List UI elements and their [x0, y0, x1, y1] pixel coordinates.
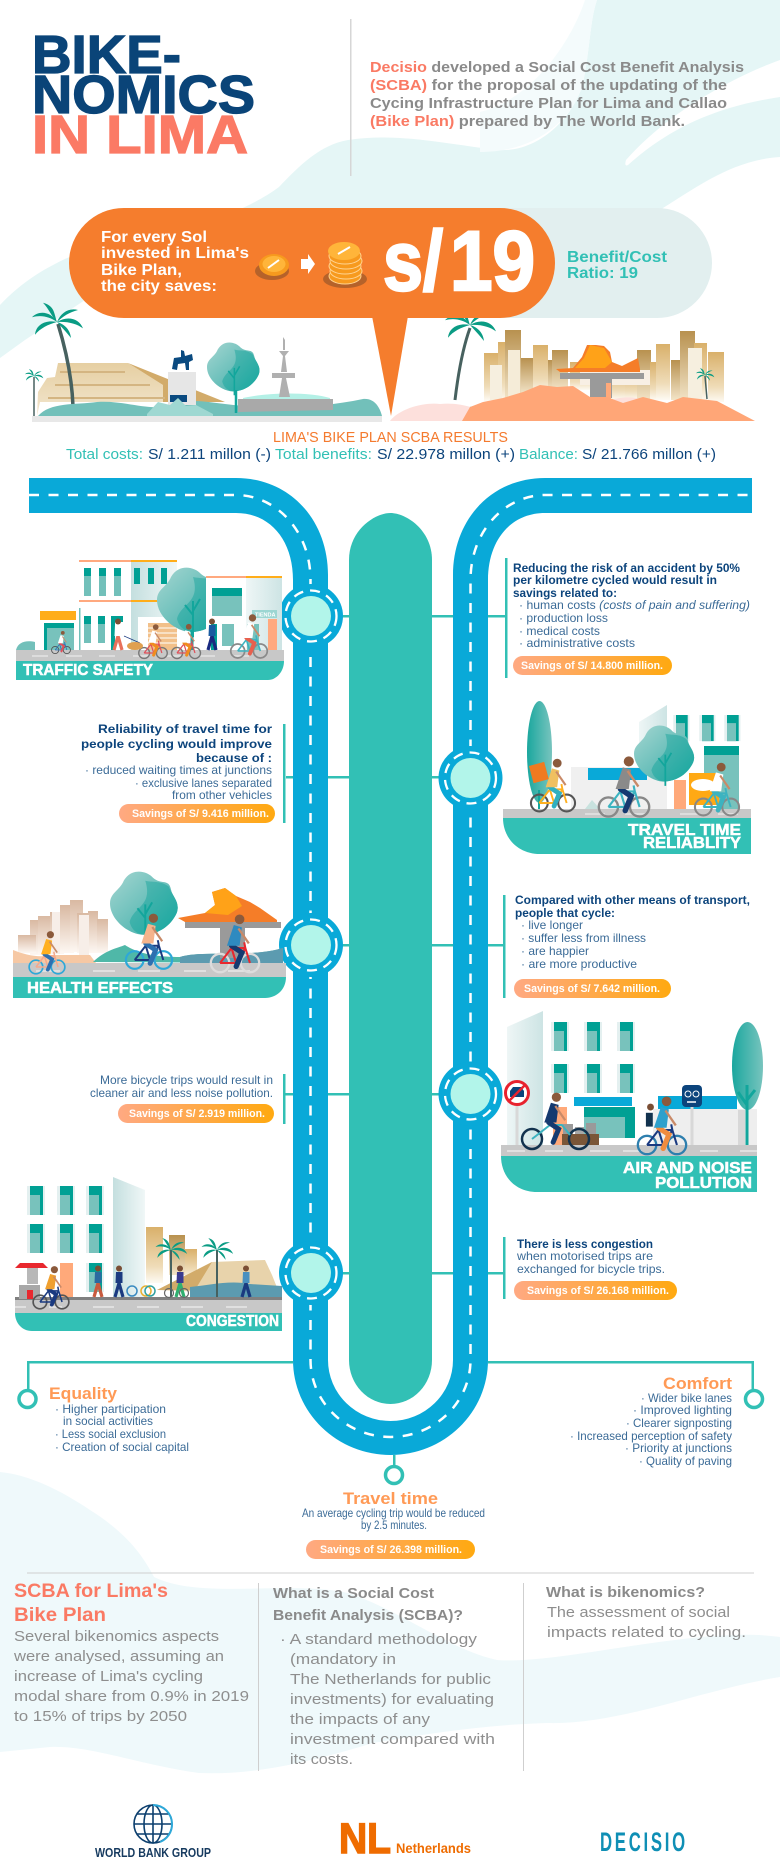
text: travel time reliability: · reduced waiting times at junctions: [85, 764, 272, 777]
text: comfort: Comfort: [663, 1374, 732, 1393]
intro paragraph: (Bike Plan) prepared by The World Bank.: [370, 114, 685, 130]
text: travel time reliability: because of :: [196, 752, 272, 765]
column: what is bikenomics: [546, 1584, 746, 1641]
background wave: bottom: [0, 1472, 780, 1773]
illustration: left cityscape: [25, 303, 382, 422]
text: health effects: · are happier: [521, 945, 589, 958]
cyclists and pedestrians: [33, 1266, 250, 1309]
label: health effects: HEALTH EFFECTS: [27, 980, 173, 997]
intro paragraph: Decisio developed a Social Cost Benefit Analysis: [370, 60, 744, 76]
savings pill: Savings of S/ 26.398 million.: [320, 1544, 462, 1556]
text: traffic safety: · production loss: [519, 612, 608, 625]
column: SCBA for Lima's Bike Plan: SCBA for Lima's: [14, 1581, 168, 1602]
savings pill: [306, 1540, 475, 1559]
column: SCBA for Lima's Bike Plan: were analysed, assuming an: [13, 1648, 224, 1665]
benefit/cost label: Benefit/Cost: [567, 249, 667, 266]
background wave: top: [0, 0, 780, 358]
label: traffic safety: TRAFFIC SAFETY: [23, 662, 154, 679]
text: congestion: [514, 1238, 677, 1300]
text: equality: Equality: [49, 1384, 118, 1403]
logo: Decisio: DECISIO: [600, 1827, 688, 1857]
savings pill: [513, 656, 672, 675]
cyclists: [522, 1093, 686, 1154]
text: health effects: [514, 894, 750, 998]
text: travel time reliability: · exclusive lanes separated: [135, 777, 272, 790]
label: air and noise pollution: POLLUTION: [655, 1175, 752, 1192]
label: travel time reliability: RELIABLITY: [643, 835, 742, 852]
text: travel time reliability: from other vehicles: [172, 789, 272, 802]
column: what is SCBA: investments) for evaluating: [290, 1691, 494, 1708]
results figures: Total benefits:: [275, 447, 372, 463]
results figures: S/ 1.211 millon (-): [148, 447, 271, 463]
column: SCBA for Lima's Bike Plan: Bike Plan: [14, 1605, 106, 1626]
column: what is SCBA: (mandatory in: [290, 1651, 396, 1668]
text: health effects: people that cycle:: [515, 907, 615, 920]
callout text: [101, 229, 249, 295]
column: SCBA for Lima's Bike Plan: to 15% of trips by 2050: [14, 1708, 187, 1725]
results figures: S/ 21.766 millon (+): [582, 447, 716, 463]
results figures: [66, 447, 716, 463]
savings pill: [514, 979, 671, 998]
illustration: right cityscape: [390, 306, 755, 421]
label: travel time reliability: [628, 822, 742, 852]
icon: bike lane sign: [682, 1085, 702, 1145]
text: equality: in social activities: [63, 1415, 153, 1428]
callout text: Bike Plan,: [101, 262, 182, 279]
column: what is bikenomics: impacts related to cycling.: [547, 1624, 746, 1641]
title: BIKE-: [32, 25, 181, 85]
label: congestion: CONGESTION: [186, 1313, 279, 1330]
text: travel time: An average cycling trip would be reduced: [302, 1507, 485, 1520]
results heading: LIMA'S BIKE PLAN SCBA RESULTS: [273, 430, 508, 446]
column: what is SCBA: the impacts of any: [290, 1711, 431, 1728]
big number: s/: [383, 214, 443, 308]
cyclists and pedestrians: [52, 614, 267, 659]
icon: no cars sign: [506, 1082, 528, 1145]
savings pill: Savings of S/ 14.800 million.: [521, 660, 663, 672]
results figures: S/ 22.978 millon (+): [377, 447, 515, 463]
speech pointer: [372, 316, 408, 416]
panel: travel time reliability illustration: [503, 701, 751, 854]
text: equality: · Creation of social capital: [55, 1441, 189, 1454]
text: health effects: · suffer less from illness: [521, 932, 646, 945]
icon: arrow: [301, 254, 315, 274]
text: congestion: exchanged for bicycle trips.: [517, 1263, 665, 1276]
title: NOMICS: [32, 65, 255, 125]
label: travel time reliability: TRAVEL TIME: [628, 822, 741, 839]
logo: Netherlands: Netherlands: [396, 1840, 471, 1856]
column: what is SCBA: What is a Social Cost: [273, 1585, 434, 1602]
text: air and noise: cleaner air and less noise pollution.: [90, 1087, 273, 1100]
benefit/cost label: [567, 249, 667, 282]
column: SCBA for Lima's Bike Plan: modal share from 0.9% in 2019: [14, 1688, 249, 1705]
savings pill: [514, 1281, 677, 1300]
text: air and noise: More bicycle trips would result in: [100, 1074, 273, 1087]
results figures: Total costs:: [66, 447, 143, 463]
intro paragraph: (SCBA) for the proposal of the updating of the: [370, 78, 727, 94]
text: equality: · Less social exclusion: [55, 1428, 166, 1441]
text: congestion: when motorised trips are: [516, 1250, 653, 1263]
text: travel time: [302, 1489, 485, 1559]
panel: health effects illustration: [13, 872, 286, 998]
logo: World Bank Group: WORLD BANK GROUP: [95, 1846, 211, 1860]
column: SCBA for Lima's Bike Plan: Several bikenomics aspects: [14, 1628, 219, 1645]
cyclists: [529, 756, 739, 817]
logo: Netherlands: [339, 1815, 471, 1863]
cart with pots: [562, 1123, 599, 1145]
intro paragraph: Cycing Infrastructure Plan for Lima and Callao: [370, 96, 727, 112]
callout text: the city saves:: [101, 278, 217, 295]
roundabouts: [279, 584, 502, 1305]
results figures: Balance:: [519, 447, 578, 463]
text: comfort: · Quality of paving: [639, 1455, 732, 1468]
savings pill: Savings of S/ 2.919 million.: [129, 1108, 265, 1120]
text: comfort: · Wider bike lanes: [641, 1392, 732, 1405]
text: traffic safety: savings related to:: [513, 587, 617, 600]
panel: air and noise pollution illustration: [501, 1011, 763, 1192]
column: what is SCBA: · A standard methodology: [280, 1631, 478, 1648]
text: health effects: · are more productive: [521, 958, 637, 971]
column: SCBA for Lima's Bike Plan: increase of Lima's cycling: [14, 1668, 203, 1685]
label: air and noise pollution: [623, 1160, 752, 1192]
callout text: invested in Lima's: [101, 245, 249, 262]
text: traffic safety: [513, 562, 750, 675]
savings pill: [119, 804, 275, 823]
logo: Netherlands: NL: [339, 1815, 391, 1863]
intro paragraph: [370, 60, 744, 130]
column: what is SCBA: investment compared with: [290, 1731, 495, 1748]
benefit/cost label: Ratio: 19: [567, 265, 638, 282]
text: travel time reliability: people cycling would improve: [81, 738, 273, 751]
road: [29, 478, 752, 1455]
callout text: For every Sol: [101, 229, 207, 246]
background wave: top light band: [480, 0, 597, 152]
footer dividers: [27, 1572, 754, 1771]
big number: [383, 214, 535, 308]
savings pill: Savings of S/ 26.168 million.: [527, 1285, 669, 1297]
label: air and noise pollution: AIR AND NOISE: [623, 1160, 752, 1177]
text: travel time: by 2.5 minutes.: [361, 1519, 427, 1532]
column: what is SCBA: [273, 1585, 495, 1768]
text: comfort: · Priority at junctions: [625, 1442, 732, 1455]
column: what is SCBA: The Netherlands for public: [290, 1671, 492, 1688]
logo: World Bank Group: [95, 1805, 211, 1860]
panel: traffic safety illustration: [16, 560, 284, 680]
text: travel time reliability: [81, 723, 275, 823]
savings pill: [118, 1104, 274, 1123]
text: comfort: · Increased perception of safety: [570, 1430, 732, 1443]
savings pill: Savings of S/ 9.416 million.: [132, 808, 269, 820]
panel: congestion illustration: [15, 1177, 282, 1331]
big number: 19: [450, 214, 535, 308]
text: traffic safety: Reducing the risk of an accident by 50%: [513, 562, 740, 575]
panel: traffic safety illustration: TIENDA: [255, 612, 276, 618]
food cart: [15, 1263, 48, 1299]
savings pill: Savings of S/ 7.642 million.: [524, 983, 660, 995]
text: equality: · Higher participation: [55, 1403, 166, 1416]
text: air and noise: [90, 1074, 274, 1123]
text: travel time: Travel time: [343, 1489, 438, 1508]
text: travel time reliability: Reliability of travel time for: [98, 723, 273, 736]
text: equality: [49, 1384, 189, 1454]
text: traffic safety: · human costs (costs of pain and suffering): [519, 599, 750, 612]
text: health effects: · live longer: [521, 919, 583, 932]
text: comfort: · Clearer signposting: [626, 1417, 732, 1430]
central teal strip: [349, 513, 432, 1404]
savings callout: [69, 208, 555, 318]
column: what is SCBA: Benefit Analysis (SCBA)?: [273, 1607, 463, 1624]
column: what is bikenomics: What is bikenomics?: [546, 1584, 705, 1601]
header divider line: [350, 19, 352, 176]
text: comfort: · Improved lighting: [633, 1404, 732, 1417]
column: what is SCBA: its costs.: [290, 1751, 353, 1768]
text: traffic safety: per kilometre cycled would result in: [513, 574, 717, 587]
text: comfort: [570, 1374, 732, 1468]
column: SCBA for Lima's Bike Plan: [13, 1581, 249, 1725]
column: what is bikenomics: The assessment of social: [547, 1604, 730, 1621]
connector end circles: [19, 1390, 762, 1484]
text: health effects: Compared with other means of transport,: [515, 894, 750, 907]
title: [32, 25, 255, 165]
pill: benefit/cost ratio background: [300, 208, 712, 318]
connector lines: [27, 558, 754, 1467]
text: traffic safety: · administrative costs: [519, 637, 635, 650]
cyclists: [29, 914, 259, 974]
text: traffic safety: · medical costs: [519, 625, 600, 638]
text: congestion: There is less congestion: [517, 1238, 653, 1251]
icon: single coin: [255, 254, 289, 280]
title: IN LIMA: [32, 105, 248, 165]
icon: coin stack: [323, 242, 367, 288]
